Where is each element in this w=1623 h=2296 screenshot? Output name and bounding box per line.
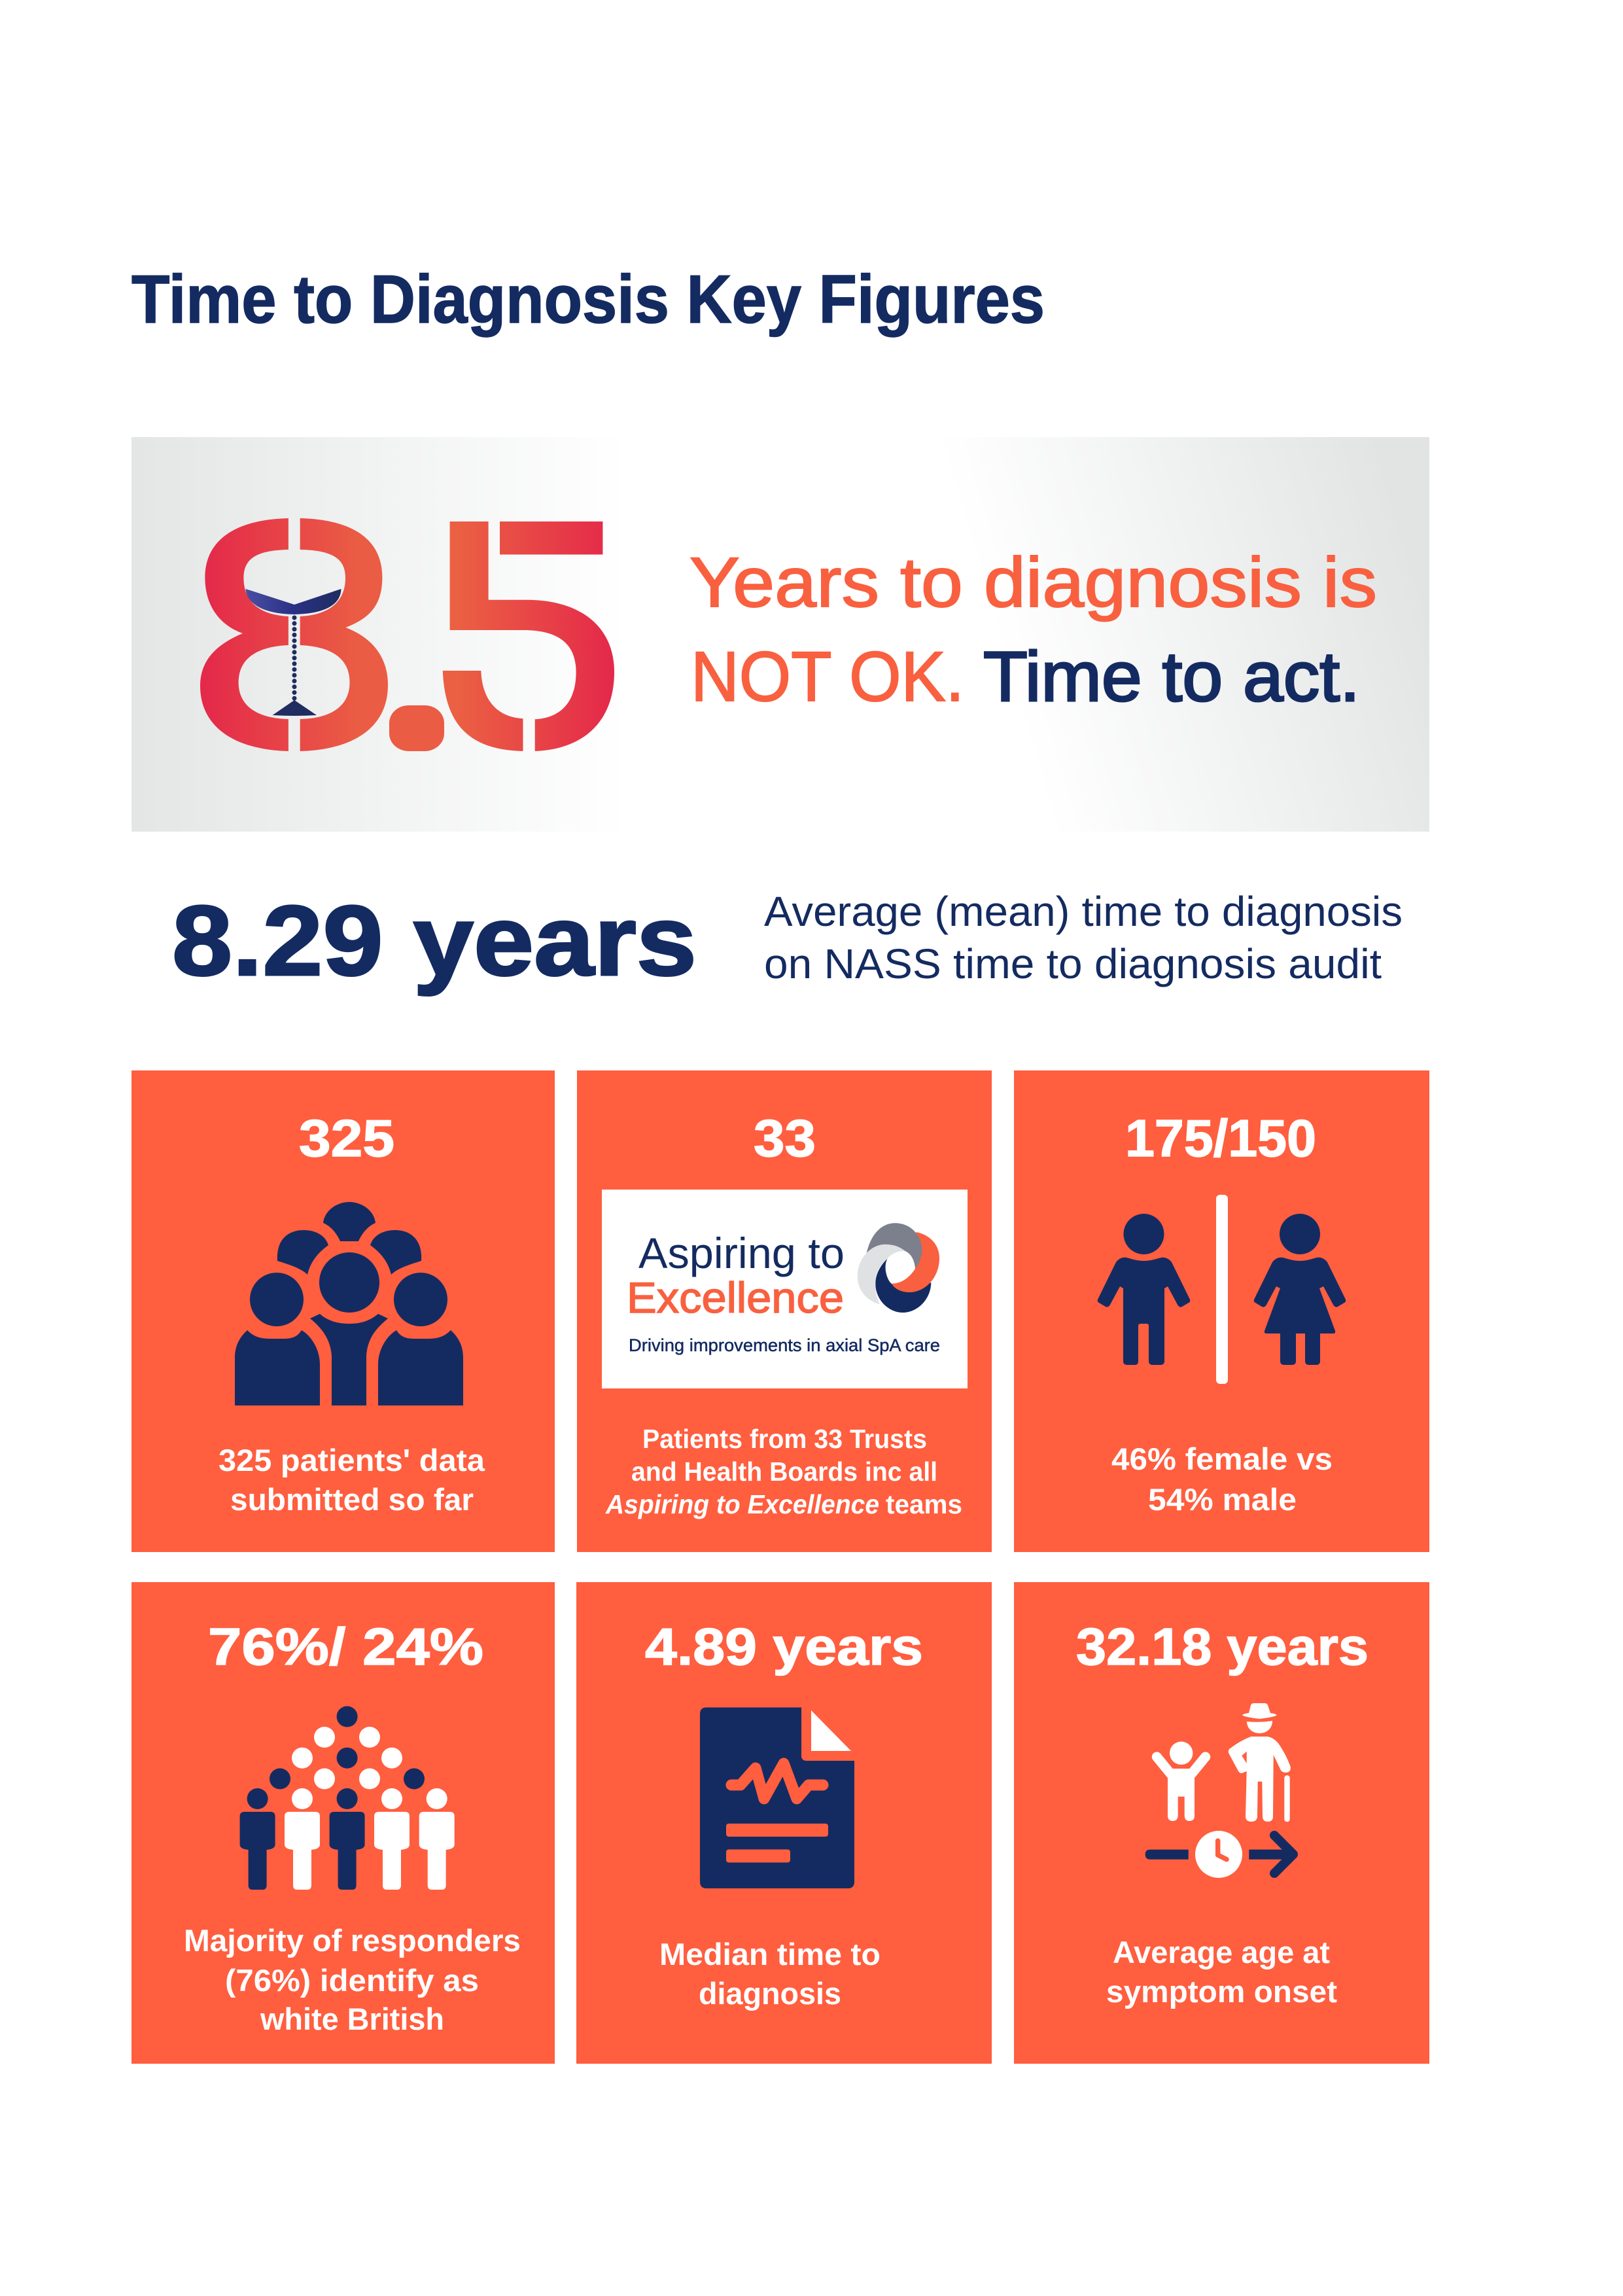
older adult figure with hat and cane <box>1229 1703 1291 1822</box>
figure: 76%/ 24% <box>208 1617 483 1676</box>
title: Time to Diagnosis Key Figures <box>131 262 1045 338</box>
caption <box>1106 1935 1337 2009</box>
figure: 325 <box>299 1109 394 1167</box>
headline text: Time to act. <box>983 637 1360 716</box>
icon: child and older adult with timeline <box>1145 1703 1293 1878</box>
caption: (76%) identify as <box>225 1963 479 1998</box>
navy crowd <box>240 1706 425 1890</box>
card background <box>576 1582 992 2064</box>
card background <box>1014 1070 1429 1552</box>
caption: diagnosis <box>699 1976 841 2011</box>
caption: and Health Boards inc all <box>631 1457 937 1487</box>
caption: teams <box>886 1489 962 1519</box>
caption: submitted so far <box>230 1482 474 1517</box>
stat: 8.29 years: 8.29 years <box>172 885 697 997</box>
figure: 33 <box>754 1109 816 1167</box>
timeline arrow <box>1145 1835 1293 1873</box>
icon: female figure <box>1254 1214 1346 1365</box>
child figure <box>1157 1742 1206 1821</box>
headline text <box>689 542 1377 716</box>
stat description <box>764 888 1403 987</box>
caption: 325 patients' data <box>218 1443 485 1477</box>
card background <box>577 1070 992 1552</box>
card background <box>131 1582 555 2064</box>
logo: Aspiring to Excellence: Excellence <box>627 1273 844 1322</box>
logo: Aspiring to Excellence <box>602 1190 968 1388</box>
divider <box>1216 1195 1228 1384</box>
caption: Median time to <box>659 1937 881 1971</box>
numeral 5 <box>443 521 614 751</box>
card background <box>131 1070 555 1552</box>
headline text: Years to diagnosis is <box>689 542 1377 622</box>
clock <box>1195 1831 1242 1878</box>
panel: 33 trusts <box>577 1070 992 1552</box>
card background <box>1014 1582 1429 2064</box>
caption: 46% female vs <box>1111 1441 1333 1476</box>
figure: 175/150 <box>1125 1109 1316 1167</box>
caption: white British <box>260 2002 444 2036</box>
panel: median time <box>576 1582 992 2064</box>
panel: 8.5 years banner <box>131 437 1429 832</box>
caption <box>1111 1441 1333 1517</box>
white crowd <box>285 1727 455 1890</box>
caption <box>605 1424 962 1519</box>
headline text: NOT OK. <box>691 637 964 716</box>
stat description: on NASS time to diagnosis audit <box>764 940 1382 987</box>
hourglass dotted stream <box>292 618 297 700</box>
icon: group of people <box>235 1202 463 1405</box>
logo: Aspiring to Excellence: Aspiring to <box>638 1229 845 1277</box>
caption <box>218 1443 485 1517</box>
logo: Aspiring to Excellence: Driving improvements in axial SpA care <box>629 1335 940 1355</box>
decimal point <box>389 705 444 751</box>
icon: logo swirl <box>858 1223 939 1313</box>
figure: 32.18 years <box>1076 1617 1369 1676</box>
caption: symptom onset <box>1106 1974 1337 2009</box>
caption: Average age at <box>1113 1935 1330 1969</box>
icon: crowd of people <box>240 1706 455 1890</box>
hourglass sand pile <box>273 700 317 716</box>
panel: age at onset <box>1014 1582 1429 2064</box>
panel: 325 patients <box>131 1070 555 1552</box>
numeral 8 <box>200 518 388 751</box>
graphic: 8.5 hourglass numeral <box>200 518 614 751</box>
caption: Patients from 33 Trusts <box>642 1424 927 1454</box>
caption: Majority of responders <box>184 1923 521 1958</box>
hourglass liquid <box>245 589 341 614</box>
icon: medical document <box>700 1708 854 1888</box>
stat description: Average (mean) time to diagnosis <box>764 888 1403 935</box>
icon: male figure <box>1098 1214 1190 1365</box>
figure: 4.89 years <box>645 1617 923 1676</box>
caption: 54% male <box>1148 1482 1297 1517</box>
caption <box>659 1937 881 2011</box>
panel: ethnicity <box>131 1582 555 2064</box>
panel: gender split <box>1014 1070 1429 1552</box>
banner background <box>131 437 1429 832</box>
caption: Aspiring to Excellence <box>605 1489 879 1519</box>
caption <box>184 1923 521 2036</box>
